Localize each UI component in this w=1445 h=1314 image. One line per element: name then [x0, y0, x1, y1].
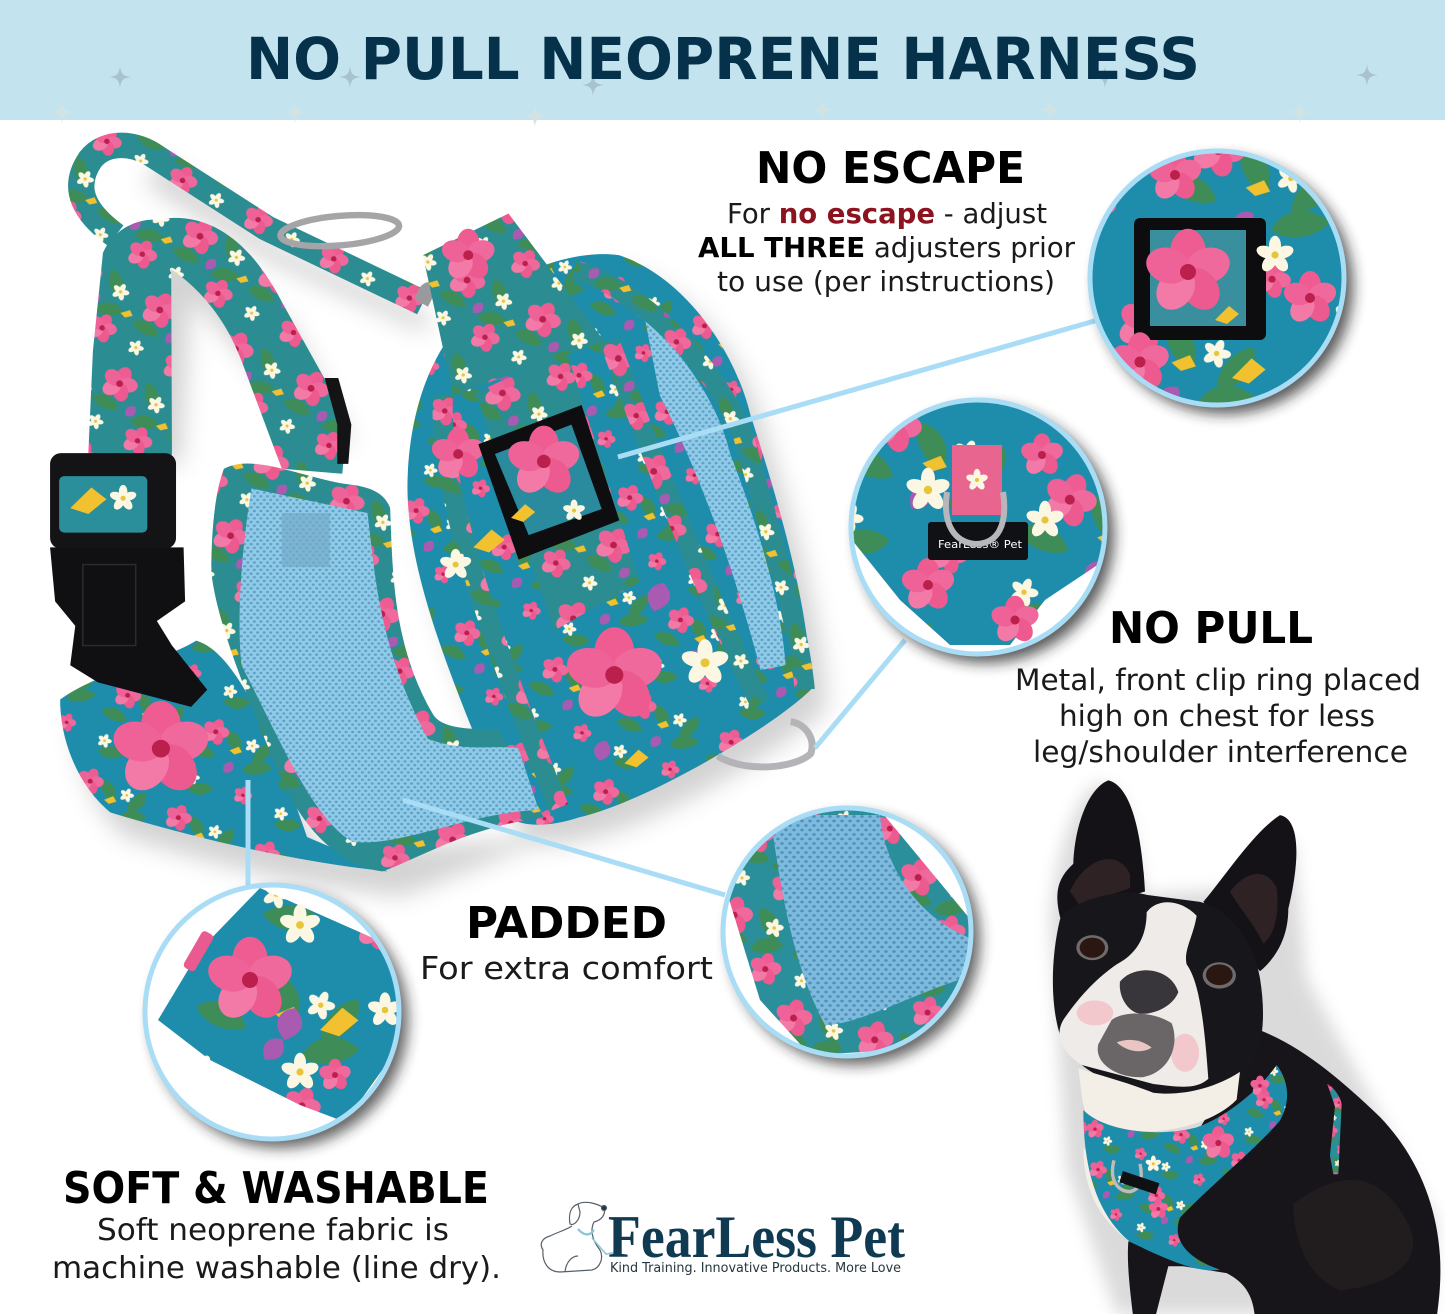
right ear — [1203, 815, 1296, 971]
detail circle: padded mesh — [720, 805, 980, 1065]
vertical adjuster strap — [476, 351, 640, 631]
lower left pouch — [60, 641, 388, 871]
detail circle: front clip ring: FearLess® Pet — [938, 538, 1023, 551]
soft and washable callout — [52, 1163, 501, 1286]
left inner ear — [1070, 859, 1130, 905]
belly mesh lining — [240, 488, 539, 842]
icon: logo dog — [541, 1202, 618, 1272]
top D ring — [279, 211, 400, 250]
soft and washable heading: SOFT & WASHABLE — [63, 1163, 489, 1214]
white lower chest — [1083, 1148, 1140, 1242]
second strap — [161, 218, 347, 474]
no escape line 1: For no escape - adjust — [727, 197, 1047, 230]
body: chest panel — [407, 254, 811, 825]
body binding border — [443, 270, 805, 808]
padded text: For extra comfort — [420, 951, 713, 987]
no escape line 2: ALL THREE adjusters prior — [698, 231, 1075, 264]
head — [1053, 893, 1263, 1096]
right inner ear — [1230, 874, 1278, 944]
no pull line 3: leg/shoulder interference — [1033, 735, 1408, 769]
harness D ring — [1113, 1160, 1141, 1192]
left eye — [1076, 935, 1108, 960]
dog wearing harness — [1083, 1065, 1287, 1270]
title: NO PULL NEOPRENE HARNESS — [246, 25, 1200, 93]
right eye — [1203, 962, 1236, 989]
bottom D ring — [718, 722, 812, 767]
no escape line 3: to use (per instructions) — [717, 265, 1055, 298]
nose — [1120, 970, 1178, 1014]
detail circle: adjuster buckle — [1085, 145, 1353, 414]
harness flowers — [1085, 1075, 1271, 1220]
detail circle: soft fabric — [140, 880, 408, 1148]
connector line: padded — [403, 800, 725, 895]
no escape callout — [698, 143, 1075, 298]
large hibiscus — [562, 627, 667, 725]
padded heading: PADDED — [466, 898, 667, 949]
brindle highlight — [1293, 1180, 1413, 1290]
no pull heading: NO PULL — [1109, 603, 1313, 654]
stitched label on mesh — [282, 513, 330, 567]
no pull line 1: Metal, front clip ring placed — [1015, 663, 1421, 697]
detail circle: front clip ring — [848, 398, 1114, 663]
header banner — [0, 0, 1445, 127]
harness product illustration — [50, 145, 826, 896]
no escape heading: NO ESCAPE — [756, 143, 1025, 194]
dog photo illustration — [1050, 780, 1440, 1314]
upper strap tab — [423, 213, 604, 395]
slider on second strap — [325, 378, 351, 464]
no pull line 2: high on chest for less — [1059, 699, 1375, 733]
logo tagline: Kind Training. Innovative Products. More Love — [610, 1261, 901, 1276]
rear ring — [415, 282, 438, 307]
padded callout — [420, 898, 713, 987]
dark muzzle — [1098, 1014, 1175, 1077]
harness tag — [1119, 1171, 1159, 1195]
pouch hibiscus — [108, 701, 214, 799]
harness drop shadow — [75, 159, 826, 896]
soft line 1: Soft neoprene fabric is — [97, 1213, 449, 1248]
right pink patch — [1171, 1034, 1199, 1072]
side flowers — [429, 428, 730, 767]
left strap — [88, 220, 172, 464]
white chest — [1078, 1068, 1240, 1131]
adjuster buckle — [478, 405, 619, 560]
dog body — [1128, 1030, 1440, 1314]
soft line 2: machine washable (line dry). — [52, 1251, 501, 1286]
no pull callout — [1015, 603, 1421, 769]
white blaze and muzzle — [1060, 902, 1208, 1087]
top loop strap — [81, 145, 423, 303]
connector line: soft and washable — [246, 780, 250, 888]
side release buckle — [50, 453, 207, 707]
connector line: no pull — [815, 640, 905, 748]
harness hibiscus — [1201, 1126, 1236, 1161]
mouth — [1117, 1040, 1152, 1051]
back strap — [1327, 1084, 1342, 1174]
logo wordmark: FearLess Pet — [608, 1204, 905, 1270]
right side mesh lining — [645, 317, 786, 670]
belly panel floral border — [211, 463, 544, 871]
left ear — [1057, 780, 1145, 919]
logo: FearLess Pet — [541, 1202, 905, 1276]
strap flower — [439, 229, 498, 283]
dog soft shadow — [1050, 784, 1437, 1314]
left pink patch — [1077, 1000, 1113, 1025]
connector line: no escape — [618, 320, 1098, 457]
